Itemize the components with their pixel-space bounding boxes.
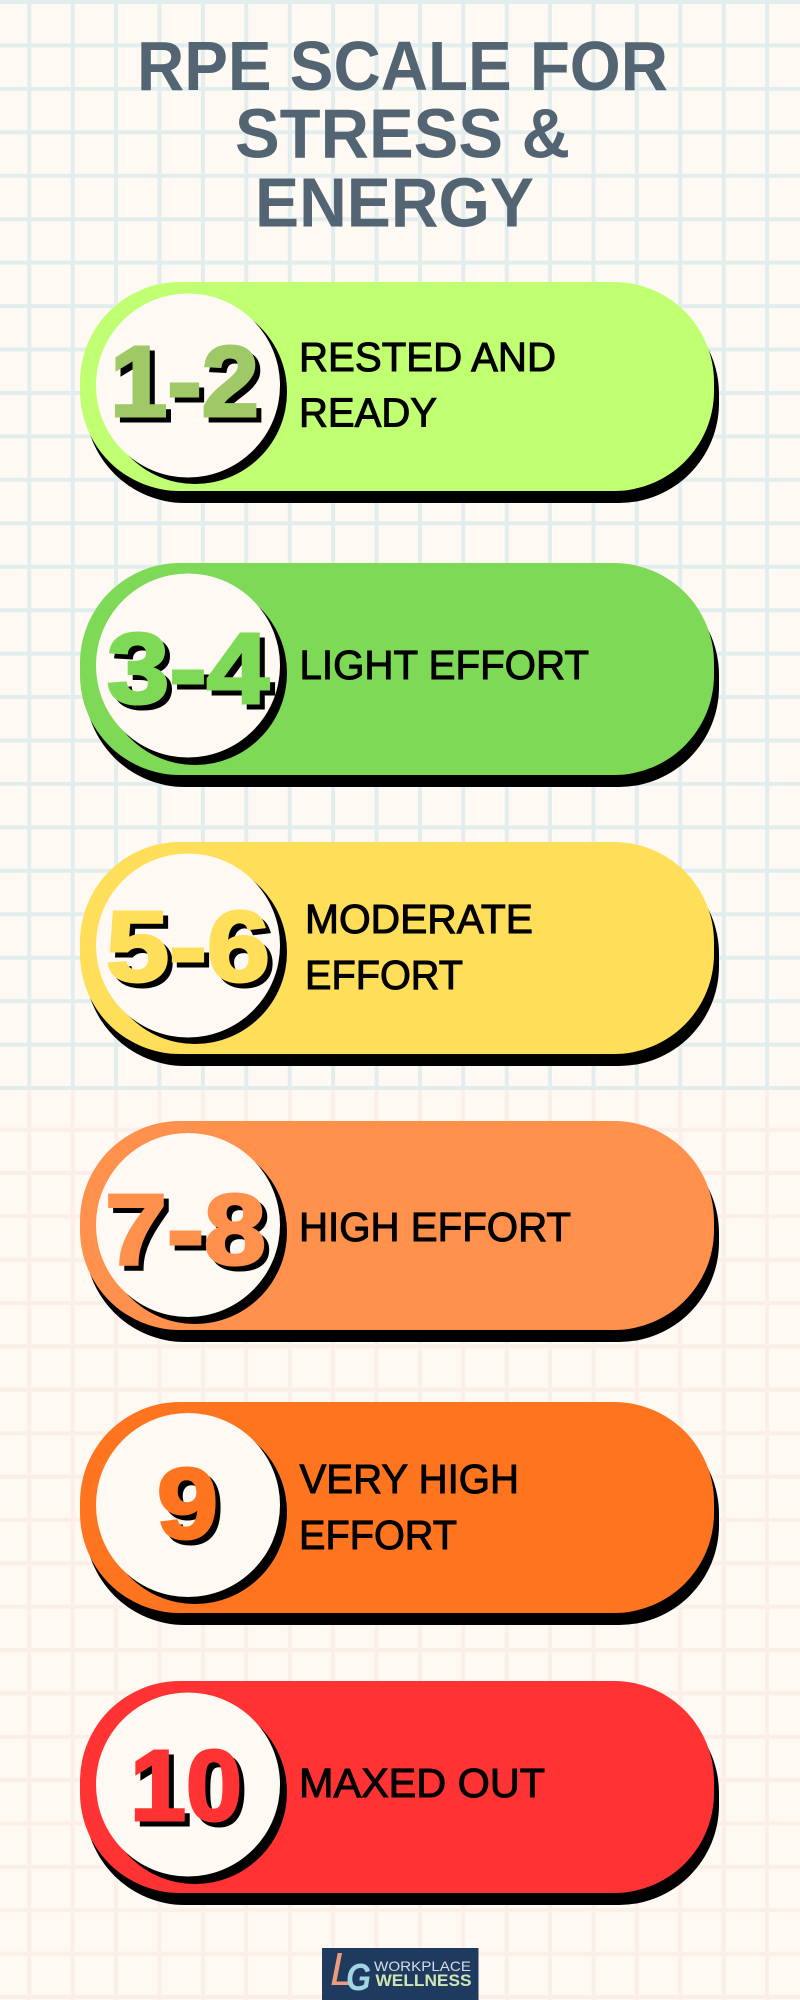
- number badge: 5-6: [96, 854, 280, 1038]
- label: high effort: HIGH EFFORT: [299, 1204, 571, 1250]
- number badge: 10: 10: [130, 1730, 242, 1842]
- label: light effort: LIGHT EFFORT: [300, 642, 589, 688]
- number badge: 9: [96, 1413, 280, 1597]
- title: ENERGY: [255, 164, 534, 242]
- label: rested and ready: [299, 334, 556, 436]
- label: rested and ready: RESTED AND: [299, 334, 556, 380]
- logo: LG Workplace Wellness: L: [330, 1943, 356, 1995]
- label: very high effort: [299, 1456, 519, 1558]
- label: moderate effort: EFFORT: [305, 952, 463, 998]
- number badge: 3-4: [96, 574, 280, 758]
- title: RPE SCALE FOR: [137, 27, 668, 105]
- title: STRESS &: [235, 94, 570, 172]
- number badge: 1-2: 1-2: [110, 326, 259, 438]
- number badge: 7-8: 7-8: [105, 1174, 266, 1286]
- logo: LG Workplace Wellness: WORKPLACE: [374, 1958, 471, 1974]
- panel: RPE 3-4 light effort: [80, 563, 719, 787]
- label: rested and ready: READY: [299, 390, 437, 436]
- number badge: 10: [96, 1692, 280, 1876]
- number badge: 9: 9: [157, 1448, 218, 1560]
- panel: RPE 1-2 rested and ready: [80, 282, 719, 503]
- panel: RPE 7-8 high effort: [80, 1121, 719, 1342]
- logo: LG Workplace Wellness: G: [346, 1957, 371, 1999]
- label: maxed out: MAXED OUT: [299, 1760, 545, 1806]
- logo: LG Workplace Wellness: [322, 1943, 478, 2000]
- title: [137, 27, 668, 242]
- panel: RPE 10 maxed out: [80, 1681, 719, 1905]
- number badge: 7-8: [96, 1133, 280, 1317]
- panel: RPE 5-6 moderate effort: [80, 842, 719, 1066]
- number badge: 1-2: [96, 294, 280, 478]
- label: moderate effort: MODERATE: [305, 896, 533, 942]
- logo: LG Workplace Wellness: WELLNESS: [376, 1971, 472, 1990]
- panel: RPE 9 very high effort: [80, 1402, 719, 1625]
- label: very high effort: EFFORT: [299, 1512, 457, 1558]
- number badge: 3-4: 3-4: [107, 613, 269, 725]
- label: moderate effort: [305, 896, 533, 998]
- label: very high effort: VERY HIGH: [300, 1456, 519, 1502]
- number badge: 5-6: 5-6: [106, 891, 270, 1003]
